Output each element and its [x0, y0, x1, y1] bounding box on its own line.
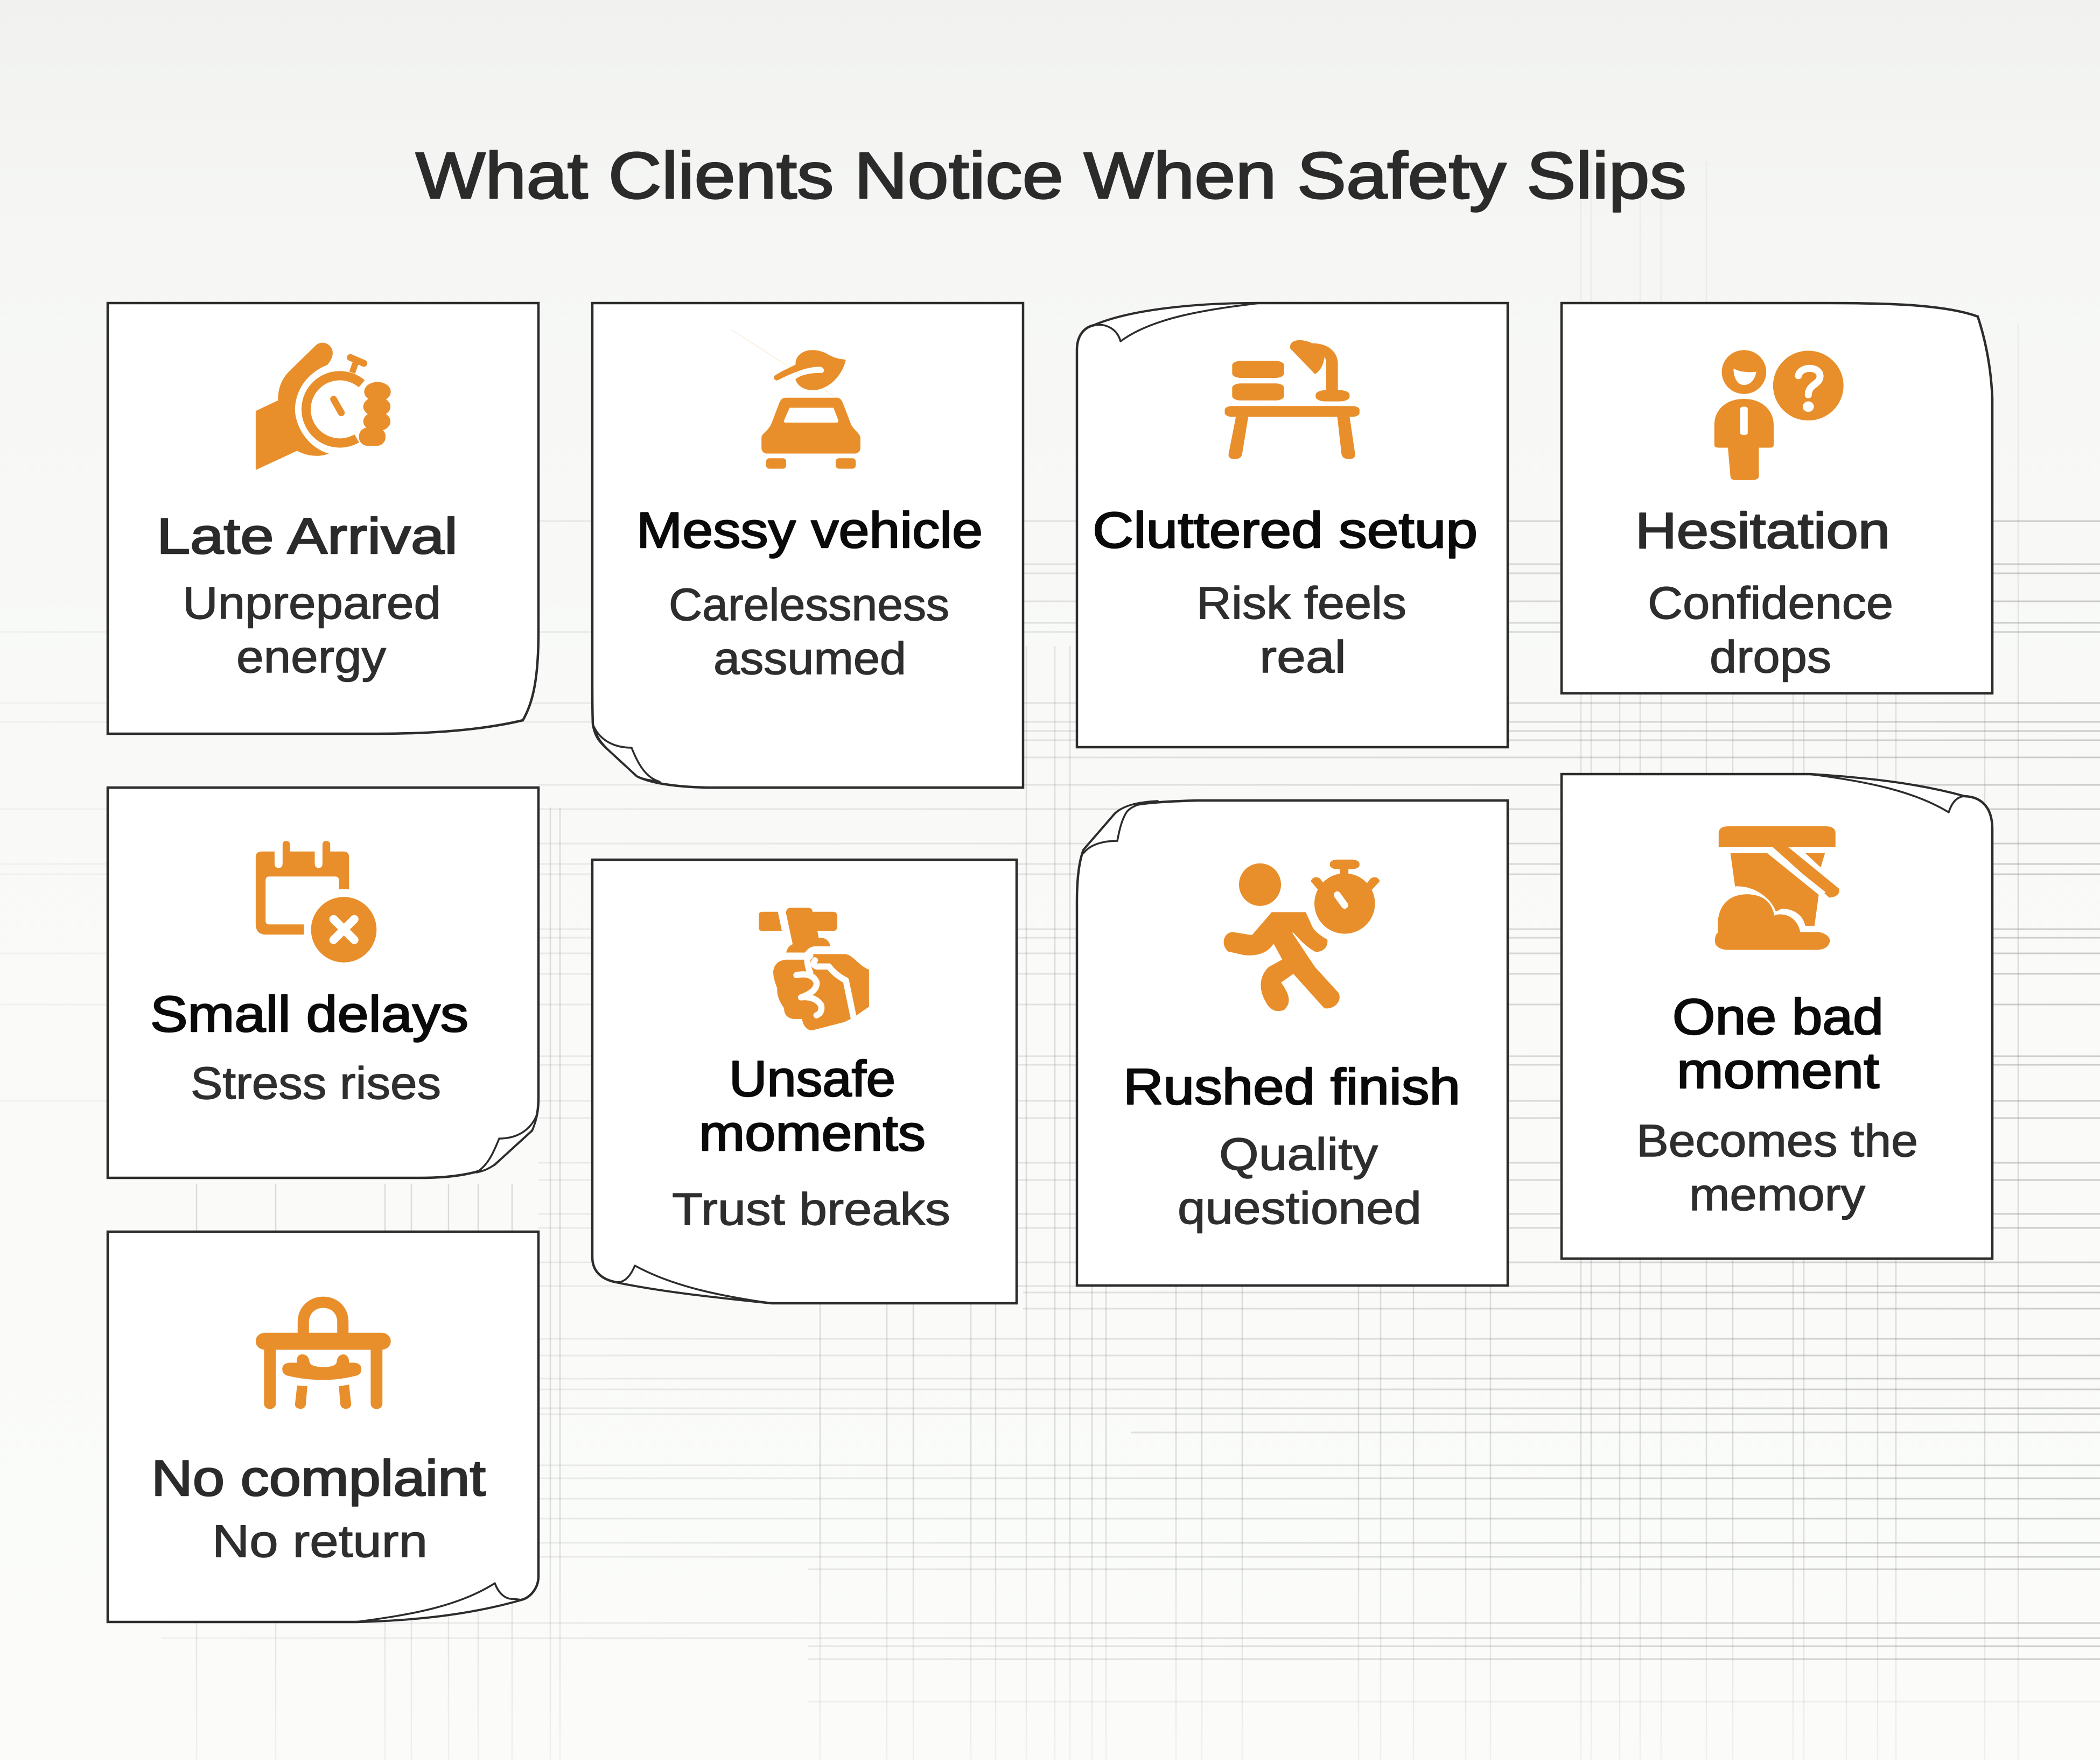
icon: desk with lamp and books — [1225, 340, 1360, 459]
heading: Unsafe moments — [699, 1050, 926, 1161]
text: No return: No return — [212, 1516, 428, 1567]
text: Becomes the memory: Becomes the — [1636, 1115, 1918, 1166]
panel: One bad moment — [1562, 774, 1992, 1259]
text: Becomes the memory: memory — [1689, 1169, 1865, 1220]
icon: car with leaf — [731, 329, 860, 469]
card outline with bottom-right curl — [108, 1232, 538, 1622]
card outline with top-left curl — [1077, 303, 1508, 747]
heading: Unsafe moments: moments — [699, 1105, 926, 1161]
text: Quality questioned: Quality — [1219, 1129, 1378, 1179]
text: Stress rises: Stress rises — [191, 1058, 441, 1108]
icon: calendar with cross — [256, 841, 376, 963]
panel: Hesitation — [1562, 303, 1992, 693]
heading: Cluttered setup: Cluttered setup — [1093, 502, 1478, 558]
text: Risk feels real — [1196, 578, 1406, 682]
icon: desk and chair — [256, 1302, 391, 1409]
card outline with bottom-left curl — [592, 860, 1017, 1303]
panel: Cluttered setup — [1077, 303, 1508, 747]
text: Trust breaks: Trust breaks — [672, 1184, 950, 1234]
panel: Rushed finish — [1077, 800, 1508, 1286]
heading: One bad moment: moment — [1677, 1042, 1879, 1099]
panel: Messy vehicle — [592, 303, 1023, 788]
card outline with bottom-left curl — [592, 303, 1023, 788]
panel: Late Arrival — [108, 303, 538, 734]
heading: Messy vehicle: Messy vehicle — [636, 502, 983, 558]
panel: Small delays — [108, 788, 538, 1178]
icon: hand holding stopwatch — [256, 343, 391, 470]
text: Quality questioned — [1178, 1129, 1422, 1233]
icon: runner with stopwatch — [1224, 860, 1380, 1011]
text: Unprepared energy: energy — [236, 631, 386, 682]
icon: fist gripping handle — [759, 908, 869, 1030]
text: Quality questioned: questioned — [1178, 1183, 1422, 1233]
text: Confidence drops: Confidence — [1648, 578, 1893, 628]
text: Unprepared energy: Unprepared — [183, 578, 441, 628]
heading: One bad moment: One bad — [1672, 988, 1884, 1045]
icon: overflowing bin — [1715, 826, 1839, 950]
panel: No complaint — [108, 1232, 538, 1622]
heading: No complaint: No complaint — [151, 1450, 486, 1506]
heading: Late Arrival: Late Arrival — [157, 508, 458, 564]
heading: Small delays: Small delays — [150, 986, 468, 1042]
card outline with top-right curl — [1562, 774, 1992, 1259]
text: Carelessness assumed — [669, 579, 949, 684]
text: Confidence drops: drops — [1710, 631, 1831, 682]
heading: Hesitation: Hesitation — [1635, 502, 1890, 559]
card outline with bottom-right curl — [108, 788, 538, 1178]
text: Risk feels real: Risk feels — [1196, 578, 1406, 628]
text: Confidence drops — [1648, 578, 1893, 682]
card outline with curved corner — [108, 303, 538, 734]
heading: Unsafe moments: Unsafe — [729, 1050, 895, 1107]
card outline with top-left curl — [1077, 800, 1508, 1286]
card outline with curved top-right corner — [1562, 303, 1992, 693]
text: Carelessness assumed: assumed — [713, 633, 906, 684]
text: Becomes the memory — [1636, 1115, 1918, 1220]
title: What Clients Notice When Safety Slips — [416, 139, 1686, 212]
icon: person with question bubble — [1714, 350, 1844, 480]
text: Unprepared energy — [183, 578, 441, 682]
text: Risk feels real: real — [1259, 631, 1346, 682]
panel: Unsafe moments — [592, 860, 1017, 1303]
text: Carelessness assumed: Carelessness — [669, 579, 949, 630]
heading: Rushed finish: Rushed finish — [1123, 1058, 1460, 1115]
heading: One bad moment — [1672, 988, 1884, 1099]
